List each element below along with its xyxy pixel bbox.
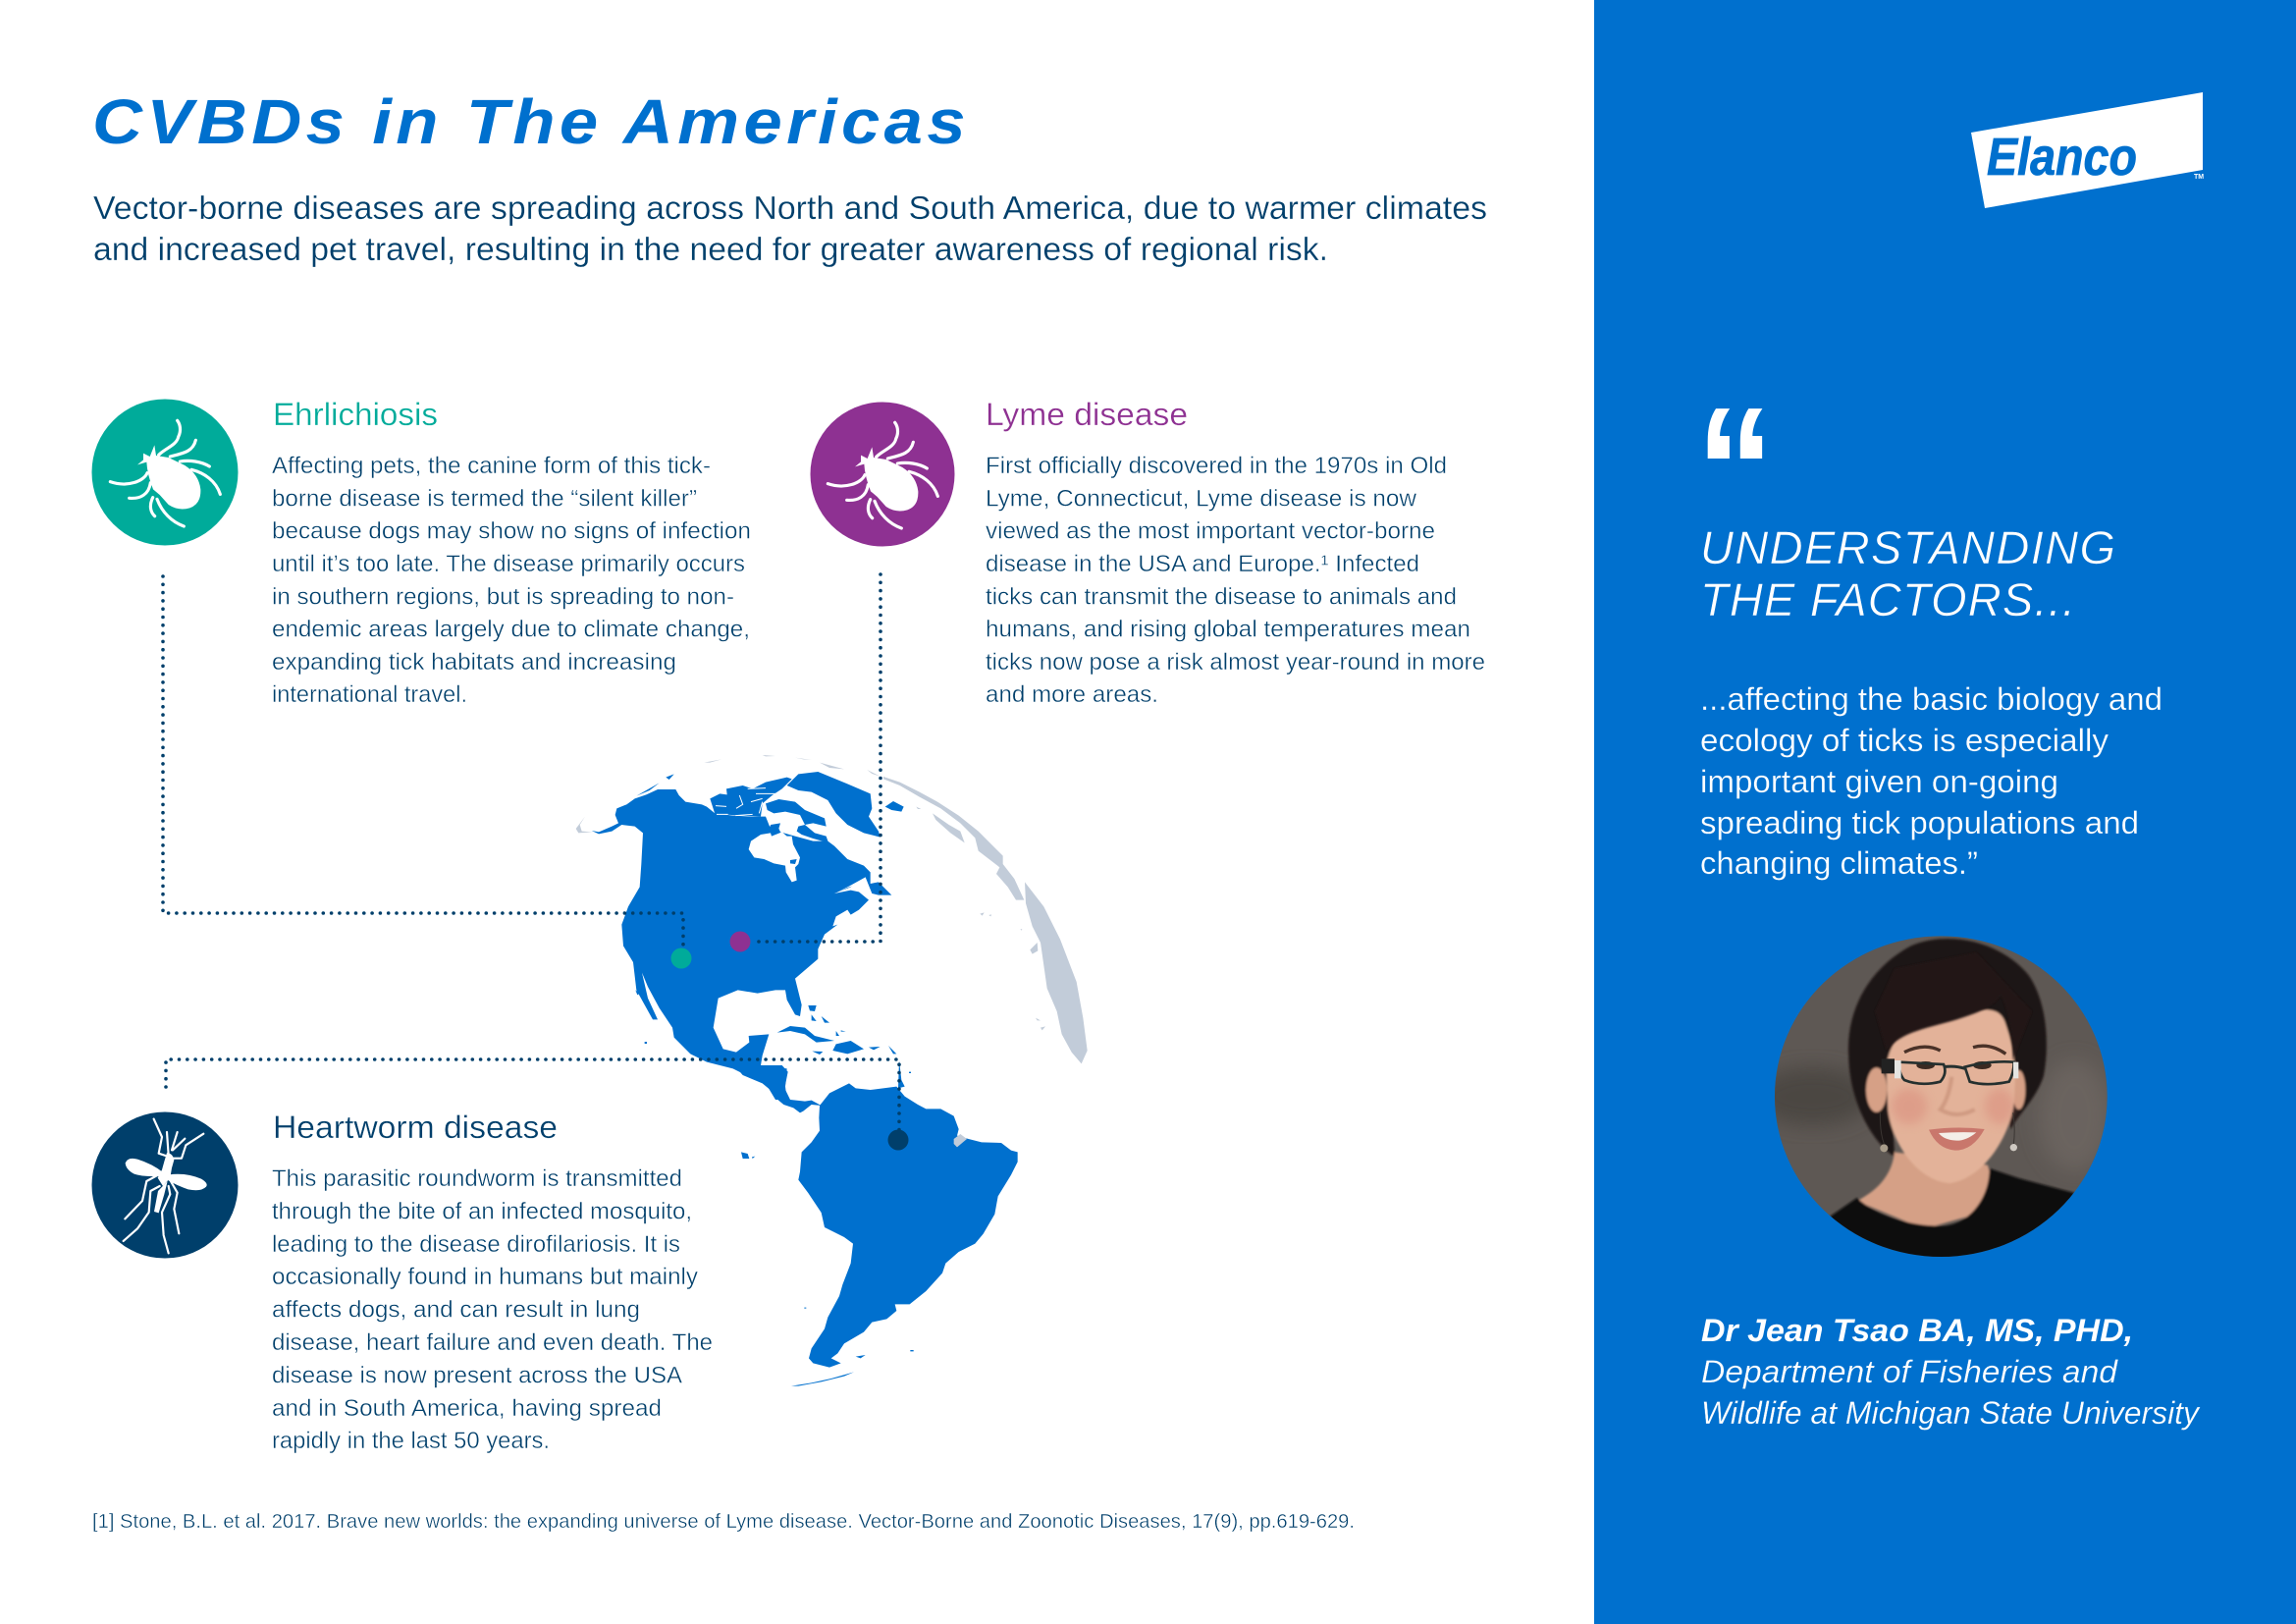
text: Heartworm disease: and in South America, having spread bbox=[272, 1395, 662, 1422]
landmass: South and Central America, Caribbean bbox=[733, 1005, 1018, 1386]
landmass: Arctic islands bbox=[635, 772, 904, 1044]
author: Wildlife at Michigan State University bbox=[1701, 1395, 2201, 1431]
map marker: Lyme disease bbox=[730, 931, 750, 952]
text: Ehrlichiosis: until it’s too late. The disease primarily occurs bbox=[272, 551, 745, 577]
quote body bbox=[1700, 681, 2163, 881]
icon: mosquito bbox=[92, 1111, 238, 1259]
text: Heartworm disease: affects dogs, and can result in lung bbox=[272, 1297, 640, 1324]
author: Dr Jean Tsao BA, MS, PHD, bbox=[1701, 1313, 2133, 1348]
quote heading: UNDERSTANDING bbox=[1700, 521, 2115, 573]
connector: Ehrlichiosis to map bbox=[163, 576, 683, 945]
text: Heartworm disease: disease, heart failure and even death. The bbox=[272, 1329, 713, 1356]
text: Ehrlichiosis: because dogs may show no signs of infection bbox=[272, 518, 751, 545]
intro text: and increased pet travel, resulting in the need for greater awareness of regional risk. bbox=[93, 231, 1328, 267]
map marker: Heartworm disease bbox=[887, 1129, 909, 1151]
text: Ehrlichiosis: expanding tick habitats and increasing bbox=[272, 649, 676, 676]
text: Lyme disease: disease in the USA and Europe.¹ Infected bbox=[986, 551, 1419, 577]
intro text bbox=[93, 189, 1487, 267]
quote body: spreading tick populations and bbox=[1700, 805, 2139, 840]
landmass: North and Central America bbox=[592, 772, 904, 1100]
text: Heartworm disease bbox=[272, 1165, 713, 1454]
heading: Ehrlichiosis: Ehrlichiosis bbox=[273, 397, 438, 432]
text: Heartworm disease: through the bite of an infected mosquito, bbox=[272, 1198, 692, 1224]
panel: quote bbox=[1594, 0, 2296, 1624]
text: Lyme disease: Lyme, Connecticut, Lyme disease is now bbox=[986, 485, 1416, 512]
icon: Lyme disease tick bbox=[811, 403, 954, 546]
quote body: ...affecting the basic biology and bbox=[1700, 681, 2163, 717]
text: Heartworm disease: rapidly in the last 50 years. bbox=[272, 1428, 550, 1454]
portrait: Dr Jean Tsao bbox=[1775, 936, 2108, 1257]
author bbox=[1701, 1313, 2201, 1431]
text: Ehrlichiosis: in southern regions, but is spreading to non- bbox=[272, 583, 734, 610]
heading: Heartworm disease: Heartworm disease bbox=[273, 1110, 558, 1145]
connector: Heartworm disease to map bbox=[166, 1059, 899, 1131]
text: Ehrlichiosis: Affecting pets, the canine form of this tick- bbox=[272, 453, 711, 479]
text: Lyme disease: viewed as the most important vector-borne bbox=[986, 518, 1435, 545]
intro text: Vector-borne diseases are spreading across North and South America, due to warmer climates bbox=[93, 189, 1487, 226]
Hudson Bay bbox=[749, 832, 800, 882]
connector: Lyme disease to map bbox=[752, 574, 881, 942]
logo: Elanco bbox=[1971, 92, 2204, 208]
quotation mark: “ bbox=[1696, 371, 1774, 568]
text: Heartworm disease: disease is now present across the USA bbox=[272, 1362, 683, 1388]
title: CVBDs in The Americas bbox=[92, 86, 970, 157]
text: Ehrlichiosis bbox=[272, 453, 751, 708]
text: Ehrlichiosis: borne disease is termed the “silent killer” bbox=[272, 485, 697, 512]
icon: Ehrlichiosis tick bbox=[92, 399, 238, 546]
footnote: [1] Stone, B.L. et al. 2017. Brave new worlds: the expanding universe of Lyme disease. Vector-Borne and Zoonotic Diseases, 17(9), pp.619-629. bbox=[92, 1510, 1355, 1533]
text: Lyme disease: and more areas. bbox=[986, 681, 1158, 708]
author: Department of Fisheries and bbox=[1701, 1354, 2118, 1389]
quote body: ecology of ticks is especially bbox=[1700, 723, 2109, 758]
globe map bbox=[576, 755, 1088, 1386]
text: Lyme disease: humans, and rising global temperatures mean bbox=[986, 617, 1470, 643]
text: Lyme disease: ticks can transmit the disease to animals and bbox=[986, 583, 1457, 610]
text: Ehrlichiosis: international travel. bbox=[272, 681, 467, 708]
heading: Lyme disease: Lyme disease bbox=[986, 397, 1188, 432]
text: Lyme disease: ticks now pose a risk almost year-round in more bbox=[986, 649, 1485, 676]
text: Heartworm disease: This parasitic roundworm is transmitted bbox=[272, 1165, 682, 1192]
quote body: important given on-going bbox=[1700, 764, 2058, 799]
text: Lyme disease bbox=[986, 453, 1485, 708]
text: Heartworm disease: leading to the disease dirofilariosis. It is bbox=[272, 1231, 680, 1258]
quote body: changing climates.” bbox=[1700, 845, 1978, 881]
logo: Elanco: TM bbox=[2194, 174, 2204, 181]
quote heading: THE FACTORS... bbox=[1700, 573, 2075, 625]
landmass: grey far side of globe bbox=[576, 755, 1088, 1063]
text: Lyme disease: First officially discovered in the 1970s in Old bbox=[986, 453, 1447, 479]
text: Heartworm disease: occasionally found in humans but mainly bbox=[272, 1264, 699, 1290]
logo: Elanco: Elanco bbox=[1987, 128, 2137, 187]
map marker: Ehrlichiosis bbox=[671, 948, 691, 968]
text: Ehrlichiosis: endemic areas largely due to climate change, bbox=[272, 617, 750, 643]
quote heading bbox=[1700, 521, 2115, 625]
